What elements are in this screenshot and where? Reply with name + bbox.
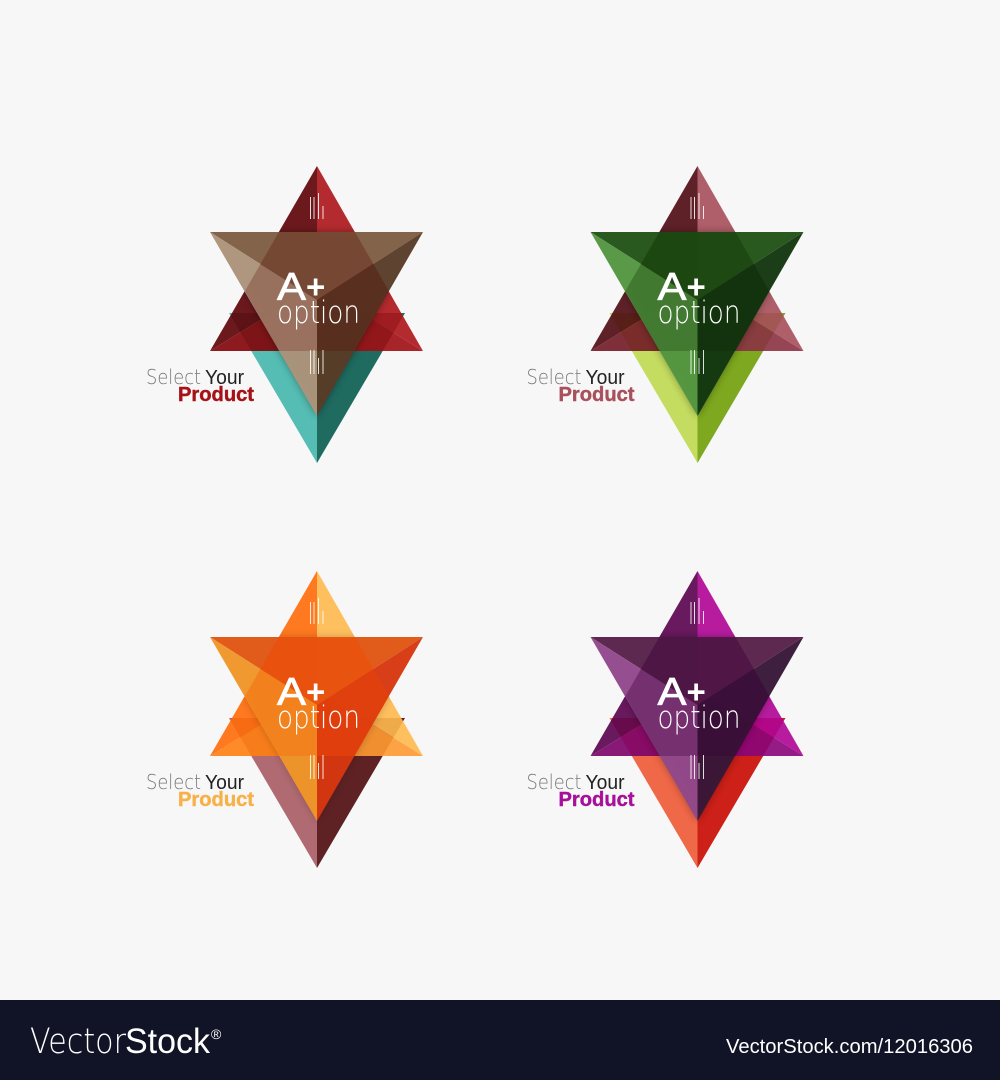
bottom bars: [310, 755, 323, 779]
grade label: option: [658, 700, 740, 736]
footer logo: Vector: [30, 1022, 127, 1062]
overlap tint: [626, 232, 770, 351]
lower triangle: [610, 718, 786, 868]
overlap tint: [245, 232, 389, 351]
bottom bars: [310, 350, 323, 374]
lower triangle: [610, 313, 786, 463]
grade label: [277, 266, 360, 331]
select your product label: [526, 770, 635, 811]
select your product label: [146, 770, 254, 811]
grade label: +: [306, 268, 325, 305]
select your product label: Your: [586, 772, 625, 794]
footer logo: ®: [211, 1026, 222, 1042]
top bars: [310, 193, 323, 219]
footer logo: Stock: [125, 1022, 210, 1061]
grade label: A: [277, 671, 306, 714]
grade label: +: [686, 673, 706, 710]
grade label: option: [658, 295, 740, 331]
select your product label: [146, 365, 254, 406]
footer logo: [30, 1022, 222, 1062]
select your product label: Select: [146, 770, 201, 794]
star 2: rose and green: [526, 166, 804, 463]
front triangle: [210, 637, 423, 821]
back triangle: [210, 166, 423, 351]
grade label: +: [686, 268, 706, 305]
select your product label: Select: [526, 770, 582, 794]
top bars: [310, 598, 323, 624]
back triangle: [590, 166, 804, 351]
bottom bars: [691, 755, 704, 779]
select your product label: Select: [526, 365, 582, 389]
select your product label: Product: [178, 789, 254, 811]
grade label: [658, 671, 740, 736]
footer image id: VectorStock.com/12016306: [726, 1036, 973, 1058]
lower triangle: [229, 313, 405, 463]
front triangle: [210, 232, 423, 416]
grade label: [277, 671, 360, 736]
star 4: purple and red: [526, 571, 804, 868]
grade label: +: [306, 673, 325, 710]
select your product label: [526, 365, 635, 406]
select your product label: Your: [205, 772, 244, 794]
top bars: [691, 598, 704, 624]
star 1: red, brown and teal: [146, 166, 423, 463]
grade label: option: [277, 295, 360, 331]
grade label: A: [658, 266, 686, 309]
grade label: option: [277, 700, 360, 736]
select your product label: Your: [205, 367, 244, 389]
top bars: [691, 193, 704, 219]
bottom bars: [691, 350, 704, 374]
select your product label: Your: [586, 367, 625, 389]
select your product label: Product: [178, 384, 254, 406]
back triangle: [210, 571, 423, 756]
star 3: orange and maroon: [146, 571, 423, 868]
lower triangle: [229, 718, 405, 868]
front triangle: [590, 232, 804, 416]
overlap tint: [626, 637, 770, 756]
select your product label: Select: [146, 365, 201, 389]
grade label: A: [277, 266, 306, 309]
back triangle: [590, 571, 804, 756]
grade label: A: [658, 671, 686, 714]
select your product label: Product: [558, 789, 635, 811]
front triangle: [590, 637, 804, 821]
footer bar: [0, 1000, 1000, 1080]
grade label: [658, 266, 740, 331]
overlap tint: [245, 637, 389, 756]
select your product label: Product: [558, 384, 635, 406]
